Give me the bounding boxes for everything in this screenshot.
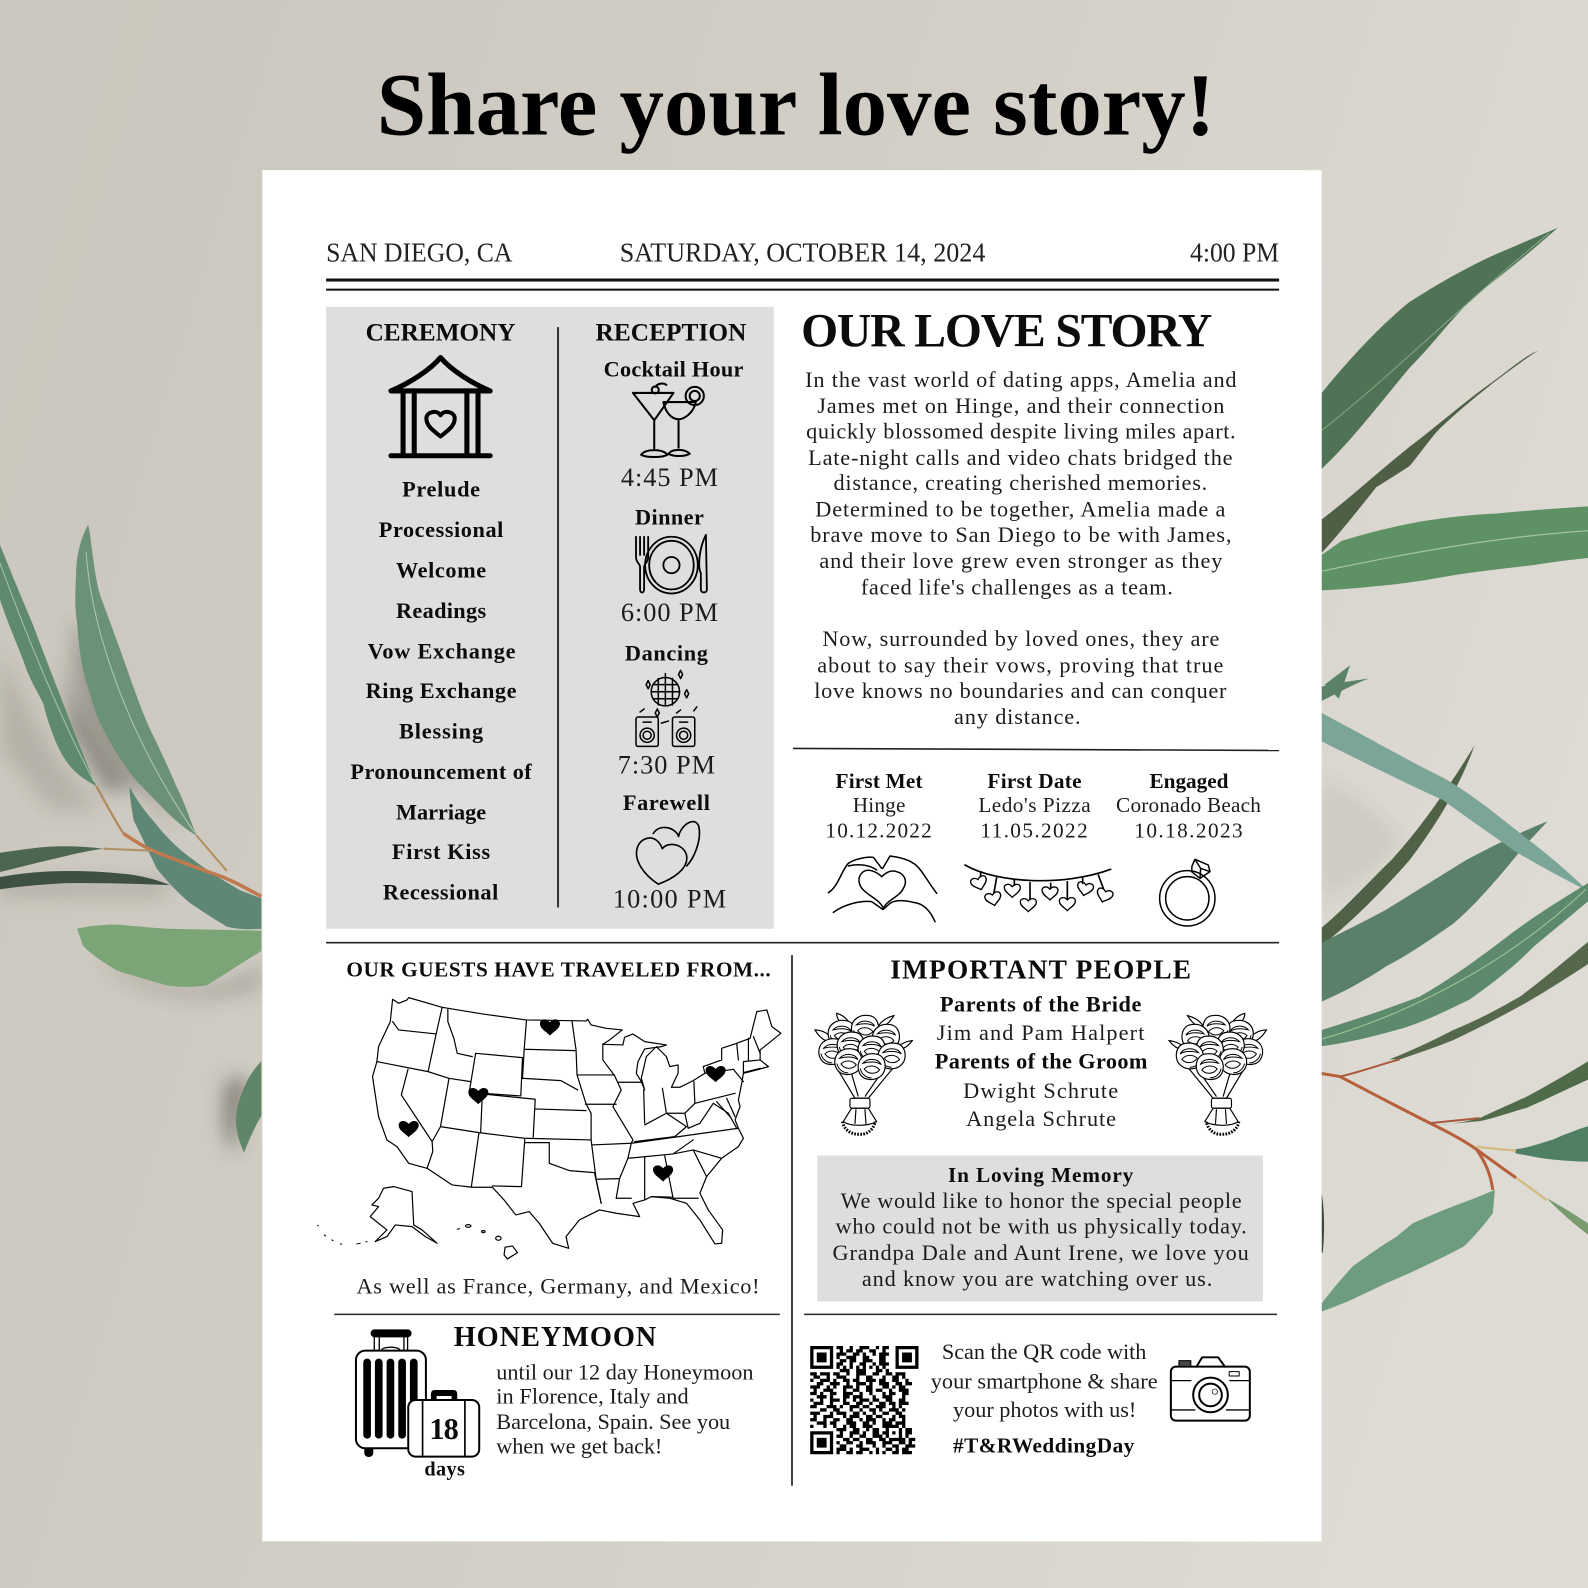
icon: suitcases with countdown	[356, 1329, 479, 1481]
reception time 10:00: 10:00 PM	[613, 884, 726, 913]
panel: in loving memory	[817, 1156, 1263, 1301]
title: Share your love story!	[377, 57, 1215, 155]
timeline: engaged	[1116, 769, 1261, 843]
love story body text: distance, creating cherished memories.	[833, 470, 1207, 495]
masthead: place, date, time: 4:00 PM	[1190, 237, 1279, 267]
eucalyptus branch: left	[0, 525, 261, 1153]
reception time 6:00: 6:00 PM	[621, 598, 718, 627]
important people names	[935, 992, 1148, 1131]
timeline: first date: 11.05.2022	[980, 819, 1088, 843]
honeymoon text: Barcelona, Spain. See you	[496, 1409, 730, 1434]
ceremony programme: First Kiss	[392, 839, 491, 864]
panel: in loving memory: We would like to honor the special people	[841, 1188, 1242, 1213]
map caption: As well as France, Germany, and Mexico!	[356, 1273, 760, 1298]
masthead: place, date, time: SATURDAY, OCTOBER 14, 2024	[620, 237, 986, 267]
dancing: Dancing	[625, 640, 708, 665]
ceremony heading: CEREMONY	[366, 318, 515, 346]
love story body text: James met on Hinge, and their connection	[817, 393, 1224, 418]
icon: cocktail glasses	[633, 384, 704, 457]
timeline: first met: First Met	[836, 769, 923, 793]
guests heading: OUR GUESTS HAVE TRAVELED FROM...	[346, 957, 771, 981]
love story body text: In the vast world of dating apps, Amelia and	[805, 367, 1237, 392]
ceremony programme: Prelude	[402, 476, 480, 501]
love story body text: faced life's challenges as a team.	[861, 574, 1173, 599]
photo sharing text: your photos with us!	[953, 1397, 1136, 1422]
honeymoon text: when we get back!	[496, 1433, 662, 1458]
love story body text: Now, surrounded by loved ones, they are	[822, 626, 1219, 651]
our love story heading: OUR LOVE STORY	[801, 305, 1212, 357]
icon: suitcases with countdown: days	[424, 1459, 465, 1481]
icon: heart hands	[828, 856, 937, 922]
icon: disco ball and speakers	[636, 670, 697, 746]
honeymoon text	[496, 1359, 753, 1458]
masthead: place, date, time	[326, 237, 1279, 267]
icon: bouquet right	[1169, 1013, 1266, 1134]
icon: two hearts	[636, 822, 699, 884]
timeline: engaged: Coronado Beach	[1116, 793, 1261, 817]
ceremony programme: Vow Exchange	[368, 638, 516, 663]
map outline and state lines	[318, 998, 781, 1259]
map heart pins	[399, 1019, 726, 1182]
panel: ceremony and reception	[326, 307, 774, 929]
important people heading: IMPORTANT PEOPLE	[890, 954, 1191, 984]
love story body text	[805, 367, 1237, 729]
love story body text: brave move to San Diego to be with James,	[810, 522, 1232, 547]
photo rule	[804, 1314, 1277, 1315]
section rule	[326, 942, 1279, 943]
important people names: Parents of the Groom	[935, 1048, 1148, 1073]
panel: in loving memory: who could not be with us physically today.	[836, 1214, 1247, 1239]
love story body text: about to say their vows, proving that true	[817, 652, 1224, 677]
icon: heart garland	[965, 865, 1114, 912]
honeymoon heading: HONEYMOON	[454, 1322, 657, 1353]
panel: in loving memory: Grandpa Dale and Aunt Irene, we love you	[832, 1240, 1249, 1265]
ceremony programme: Processional	[379, 517, 503, 542]
ceremony programme: Marriage	[396, 799, 486, 824]
timeline: first met	[825, 769, 932, 843]
ceremony programme: Pronouncement of	[350, 759, 532, 784]
dinner: Dinner	[635, 505, 704, 530]
ceremony programme: Ring Exchange	[366, 678, 517, 703]
leaf shadows	[0, 618, 1403, 1155]
masthead double rule	[326, 279, 1279, 291]
photo sharing text: your smartphone & share	[931, 1368, 1158, 1393]
timeline: first met: Hinge	[853, 793, 905, 817]
cocktail hour: Cocktail Hour	[604, 357, 743, 382]
farewell: Farewell	[623, 790, 710, 815]
ceremony programme	[350, 476, 532, 904]
map: US states with heart pins	[318, 998, 781, 1259]
timeline: first met: 10.12.2022	[825, 819, 932, 843]
timeline: first date: First Date	[987, 769, 1082, 793]
panel: in loving memory: and know you are watching over us.	[862, 1266, 1212, 1291]
icon: camera	[1171, 1357, 1250, 1421]
ceremony programme: Recessional	[383, 879, 498, 904]
masthead: place, date, time: SAN DIEGO, CA	[326, 237, 513, 267]
reception time 7:30: 7:30 PM	[618, 751, 715, 780]
timeline: first date: Ledo's Pizza	[978, 793, 1091, 817]
icon: plate and cutlery	[636, 535, 707, 593]
icon: bouquet left	[815, 1013, 912, 1134]
photo sharing text	[931, 1339, 1158, 1457]
timeline: engaged: Engaged	[1149, 769, 1229, 793]
ceremony programme: Readings	[396, 598, 486, 623]
reception time 4:45: 4:45 PM	[621, 463, 718, 492]
love story body text: and their love grew even stronger as they	[819, 548, 1223, 573]
love story body text: love knows no boundaries and can conquer	[814, 678, 1227, 703]
icon: gazebo with heart	[391, 358, 490, 456]
love story body text: quickly blossomed despite living miles apart.	[806, 419, 1236, 444]
love story body text: Determined to be together, Amelia made a	[815, 497, 1226, 522]
panel: in loving memory: In Loving Memory	[948, 1163, 1134, 1187]
eucalyptus branch: right	[1322, 228, 1588, 1312]
honeymoon rule	[334, 1314, 780, 1315]
love story body text: Late-night calls and video chats bridged the	[808, 445, 1233, 470]
important people names: Dwight Schrute	[963, 1078, 1118, 1103]
ceremony programme: Welcome	[396, 557, 486, 582]
timeline rule	[793, 748, 1279, 750]
love story body text: any distance.	[954, 704, 1081, 729]
photo sharing text: #T&RWeddingDay	[953, 1433, 1135, 1457]
QR code	[810, 1346, 918, 1454]
timeline: first date	[978, 769, 1091, 843]
newspaper card	[262, 170, 1322, 1541]
timeline: engaged: 10.18.2023	[1134, 819, 1243, 843]
column divider	[791, 955, 793, 1486]
important people names: Jim and Pam Halpert	[937, 1020, 1145, 1045]
icon: suitcases with countdown: 18	[429, 1412, 459, 1446]
honeymoon text: in Florence, Italy and	[496, 1384, 689, 1409]
photo sharing text: Scan the QR code with	[942, 1339, 1146, 1364]
ceremony programme: Blessing	[399, 718, 483, 743]
important people names: Angela Schrute	[966, 1106, 1116, 1131]
reception heading: RECEPTION	[596, 318, 746, 346]
honeymoon text: until our 12 day Honeymoon	[496, 1359, 753, 1384]
important people names: Parents of the Bride	[940, 992, 1141, 1017]
icon: engagement ring	[1160, 859, 1215, 926]
